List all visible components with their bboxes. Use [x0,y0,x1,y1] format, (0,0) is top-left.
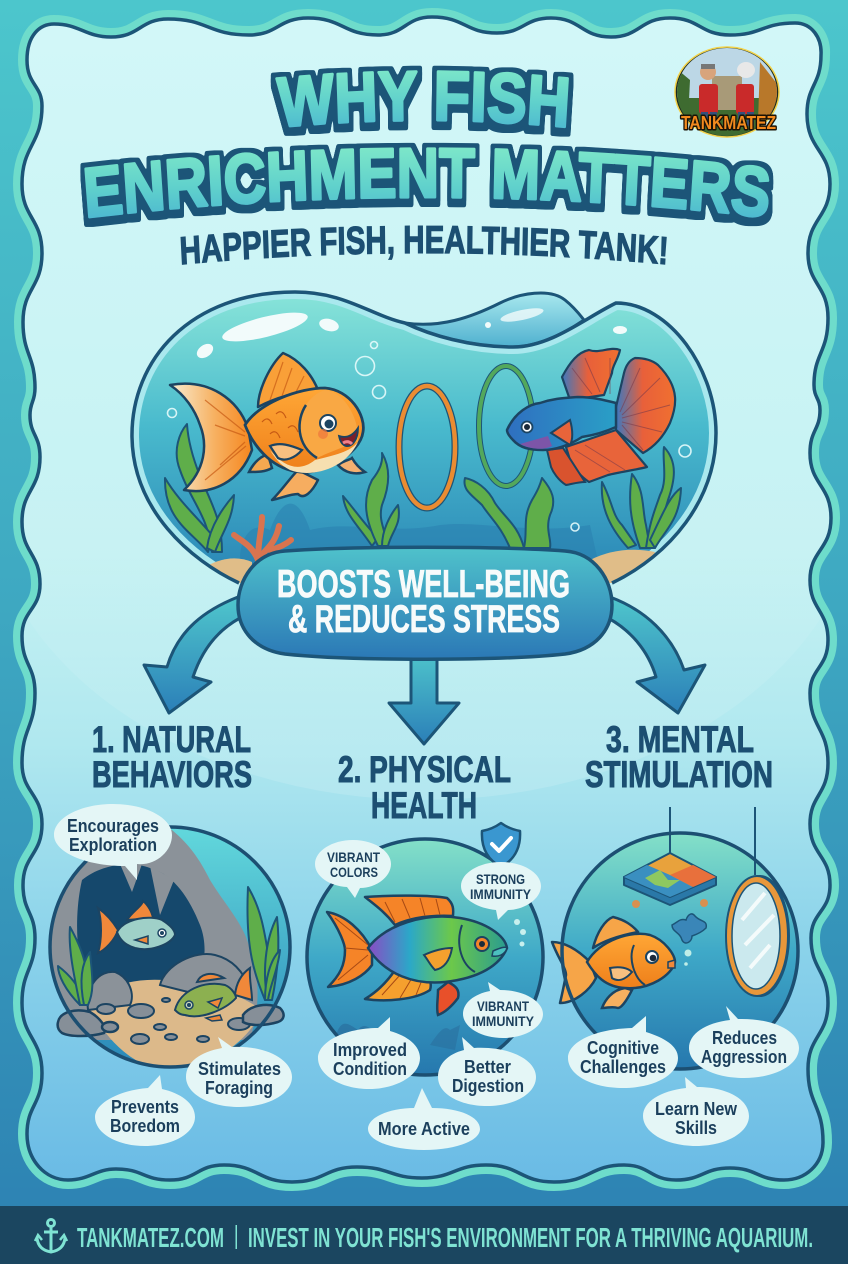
arrow: right [608,597,705,713]
goldfish [170,353,365,500]
cave rock [50,830,258,1040]
banner: boosts well-being: & REDUCES STRESS [288,598,560,641]
back water bump [405,293,584,347]
coral [234,517,291,560]
betta fish [507,349,675,485]
heading: physical health: HEALTH [371,785,477,826]
banner: boosts well-being: BOOSTS WELL-BEING [277,563,570,606]
callout: vibrant colors: COLORS [330,864,378,880]
heading: mental stimulation: STIMULATION [585,754,773,795]
seaweed middle [343,453,399,546]
callout: cognitive challenges: Cognitive [587,1038,659,1058]
callout: reduces aggression [689,1006,799,1078]
subtitle: HAPPIER FISH, HEALTHIER TANK! [180,226,667,265]
rainbow fish [327,896,507,1015]
callout: encourages exploration: Encourages [67,816,159,836]
title: Why Fish: WHY FISH [270,66,574,137]
callout: more active [368,1088,480,1150]
heading: mental stimulation [585,719,773,795]
callout: improved condition: Improved [333,1040,407,1060]
callout: strong immunity [461,862,541,920]
arrow: center [389,650,459,744]
heading: physical health: 2. PHYSICAL [338,749,511,790]
dots [632,899,708,908]
callout: learn new skills: Skills [675,1118,717,1138]
foraging fish [175,968,252,1021]
seaweed left [58,927,92,1005]
panel: physical health scene [307,839,543,1090]
icon: anchor [35,1220,67,1252]
sand floor [90,980,255,1066]
callout: prevents boredom [95,1075,195,1146]
callout: prevents boredom: Prevents [111,1097,179,1117]
mound rocks [158,953,243,992]
heading: physical health [338,749,511,826]
callout: vibrant colors: VIBRANT [327,849,380,865]
hanging strings [670,807,755,875]
logo: Tankmatez: TANKMATEZ [681,113,776,133]
callout: reduces aggression: Reduces [712,1028,777,1048]
panel: natural behaviors scene [50,827,290,1070]
arrow: left [144,597,240,713]
loose puzzle piece [672,914,706,943]
seaweed left [165,424,234,552]
callout: reduces aggression: Aggression [701,1047,787,1067]
callout: vibrant immunity: VIBRANT [477,998,529,1014]
callout: vibrant colors [315,840,391,898]
callout: better digestion: Digestion [452,1076,524,1096]
callout: vibrant immunity [463,982,543,1038]
callout: strong immunity: IMMUNITY [470,886,532,902]
heading: natural behaviors: BEHAVIORS [92,754,252,795]
goldfish thinking [552,917,675,1008]
aquarium illustration [120,285,730,595]
orange hoop [399,386,455,508]
tank outline [132,292,716,583]
green hoop [479,366,533,486]
footer bar: TANKMATEZ.COM [77,1222,224,1253]
callout: cognitive challenges [568,1016,678,1088]
mirror [726,875,790,997]
seaweed right [602,447,681,548]
icon: immunity shield [482,823,520,867]
callout: encourages exploration [54,804,172,880]
highlights [194,306,627,361]
callout: learn new skills: Learn New [655,1099,738,1119]
callout: stimulates foraging: Stimulates [198,1059,281,1079]
panel: mental stimulation scene [552,807,798,1069]
heading: natural behaviors: 1. NATURAL [92,719,251,760]
callout: cognitive challenges: Challenges [580,1057,666,1077]
heading: natural behaviors [92,719,252,795]
callout: prevents boredom: Boredom [110,1116,180,1136]
seaweed right middle [464,478,553,548]
callout: encourages exploration: Exploration [69,835,157,855]
callout: strong immunity: STRONG [476,871,525,887]
callout: learn new skills [643,1077,749,1146]
banner: boosts well-being [238,547,612,659]
heading: mental stimulation: 3. MENTAL [606,719,754,760]
callout: improved condition: Condition [333,1059,407,1079]
cave fish [98,901,175,953]
cave floor stones [97,998,250,1044]
callout: better digestion: Better [464,1057,511,1077]
callout: vibrant immunity: IMMUNITY [472,1013,535,1029]
footer bar [0,1206,848,1264]
callout: improved condition [318,1017,420,1089]
callout: more active: More Active [378,1119,470,1139]
callout: stimulates foraging [186,1037,292,1107]
front rocks [58,1005,284,1036]
logo: Tankmatez [675,47,779,138]
callout: better digestion [438,1037,536,1106]
bubbles [168,342,691,531]
callout: stimulates foraging: Foraging [205,1078,273,1098]
title: Enrichment Matters: ENRICHMENT MATTERS [80,142,774,227]
puzzle [624,853,716,905]
seaweed right [247,887,280,1000]
